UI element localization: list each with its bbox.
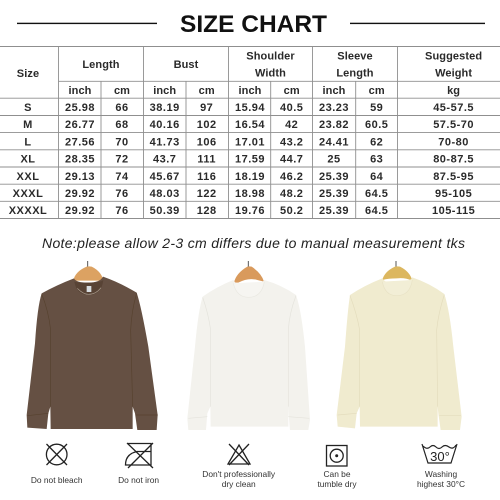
- size table: XXXL: [13, 188, 43, 200]
- size table: 72: [115, 154, 129, 166]
- size table: 24.41: [319, 136, 349, 148]
- size table: 29.92: [65, 188, 95, 200]
- size table: inch: [238, 85, 262, 97]
- size table: 19.76: [235, 205, 265, 217]
- size table: Bust: [174, 59, 199, 71]
- size table: 74: [115, 171, 129, 183]
- title: SIZE CHART: [180, 11, 327, 38]
- size table: inch: [68, 85, 92, 97]
- size table: 44.7: [280, 154, 303, 166]
- size table: 76: [115, 205, 129, 217]
- size table: 105-115: [432, 205, 475, 217]
- size table: 25.39: [319, 205, 349, 217]
- text: tumble dry: [317, 479, 357, 489]
- size table: Width: [255, 68, 286, 80]
- size table: Shoulder: [246, 50, 295, 62]
- size table: Length: [336, 68, 374, 80]
- size table: XL: [20, 154, 36, 166]
- size table: 16.54: [235, 119, 265, 131]
- size table: 42: [285, 119, 298, 131]
- text: dry clean: [222, 479, 256, 489]
- size table: 50.39: [150, 205, 180, 217]
- size table: cm: [369, 85, 385, 97]
- icon: do not dry clean: [228, 444, 250, 465]
- size table: L: [24, 136, 32, 148]
- size table: 46.2: [280, 171, 303, 183]
- size table: 18.19: [235, 171, 265, 183]
- size table: 29.13: [65, 171, 95, 183]
- size table: 29.92: [65, 205, 95, 217]
- size table: S: [24, 102, 32, 114]
- size table: 70: [115, 136, 129, 148]
- size table: 70-80: [438, 136, 469, 148]
- size table: 41.73: [150, 136, 180, 148]
- size table: kg: [447, 85, 460, 97]
- size table: 18.98: [235, 188, 265, 200]
- size table: 80-87.5: [433, 154, 474, 166]
- label: wash 30: Washing: [425, 469, 457, 479]
- icon: wash 30: [422, 444, 457, 464]
- size table: 45.67: [150, 171, 180, 183]
- label: do not bleach: Do not bleach: [31, 475, 83, 485]
- size table: inch: [153, 85, 176, 97]
- size table: 38.19: [150, 102, 180, 114]
- size table: cm: [284, 85, 300, 97]
- size table: 97: [200, 102, 213, 114]
- size table: 106: [197, 136, 217, 148]
- icon: do not bleach: [46, 444, 67, 465]
- size table: 128: [197, 205, 217, 217]
- size table: 26.77: [65, 119, 95, 131]
- size table: 23.23: [319, 102, 349, 114]
- size table: 43.7: [153, 154, 176, 166]
- size table: 25: [327, 154, 341, 166]
- size table: M: [23, 119, 33, 131]
- note: Note:please allow 2-3 cm differs due to manual measurement tks: [42, 235, 465, 251]
- size table: 23.82: [319, 119, 349, 131]
- icon: wash 30: 30°: [430, 449, 450, 464]
- size table: 45-57.5: [433, 102, 474, 114]
- size table: 17.01: [235, 136, 265, 148]
- shirt: brown: [27, 261, 158, 430]
- size table: 28.35: [65, 154, 95, 166]
- size table: 76: [115, 188, 129, 200]
- label: tumble dry: Can be: [323, 469, 351, 479]
- label: do not iron: Do not iron: [118, 475, 159, 485]
- icon: do not iron: [126, 443, 153, 468]
- size table: cm: [114, 85, 130, 97]
- size table: 64.5: [365, 188, 388, 200]
- size table: 87.5-95: [433, 171, 474, 183]
- size table: 64: [370, 171, 384, 183]
- size table: 17.59: [235, 154, 265, 166]
- size table: XXXXL: [9, 205, 47, 217]
- size table: 122: [197, 188, 217, 200]
- size table: 25.39: [319, 188, 349, 200]
- size table: 25.98: [65, 102, 95, 114]
- shirt: white: [187, 261, 310, 430]
- size table: 95-105: [435, 188, 472, 200]
- size table: 50.2: [280, 205, 303, 217]
- size table: 68: [115, 119, 129, 131]
- size table: 64.5: [365, 205, 388, 217]
- size table: 62: [370, 136, 383, 148]
- size table: 48.2: [280, 188, 303, 200]
- size table: 57.5-70: [433, 119, 474, 131]
- size table: Weight: [435, 68, 472, 80]
- size table: 63: [370, 154, 383, 166]
- size table: 40.16: [150, 119, 180, 131]
- size table: 59: [370, 102, 383, 114]
- label: do not dry clean: Don't professionally: [202, 469, 276, 479]
- size table: Sleeve: [337, 50, 373, 62]
- shirt: cream: [337, 261, 462, 430]
- size table: 27.56: [65, 136, 95, 148]
- size table: 116: [197, 171, 216, 183]
- text: highest 30°C: [417, 479, 465, 489]
- size table: 25.39: [319, 171, 349, 183]
- size table: Size: [17, 68, 39, 80]
- size table: 15.94: [235, 102, 265, 114]
- size table: 66: [115, 102, 129, 114]
- size table: XXL: [17, 171, 39, 183]
- size table: 43.2: [280, 136, 303, 148]
- size table: 111: [197, 154, 216, 166]
- size table: [0, 46, 500, 218]
- size table: 48.03: [150, 188, 180, 200]
- size table: 60.5: [365, 119, 388, 131]
- size table: inch: [322, 85, 346, 97]
- size table: cm: [199, 85, 215, 97]
- size table: Length: [82, 59, 120, 71]
- size table: Suggested: [425, 50, 482, 62]
- icon: tumble dry: [326, 446, 347, 466]
- size table: 102: [197, 119, 217, 131]
- size table: 40.5: [280, 102, 303, 114]
